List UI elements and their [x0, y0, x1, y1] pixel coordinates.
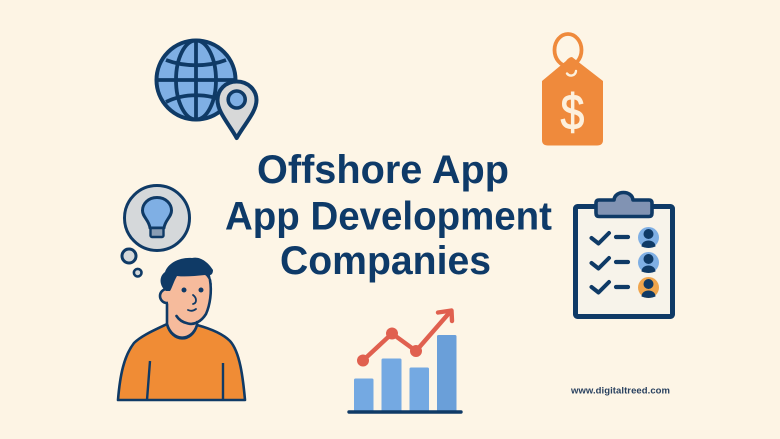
checklist row 3	[592, 277, 659, 298]
website url: www.digitaltreed.com	[570, 386, 670, 396]
chart baseline	[349, 410, 461, 414]
dollar sign: $	[561, 84, 584, 140]
orange sweater	[118, 324, 245, 400]
title: App Development	[225, 194, 552, 238]
ear	[160, 289, 174, 303]
clipboard clip	[596, 192, 652, 216]
eyes, nose and mouth	[182, 288, 186, 292]
hair	[161, 258, 213, 291]
checklist row 1	[592, 227, 659, 248]
trend line	[357, 310, 452, 366]
bars	[354, 335, 456, 412]
title	[225, 148, 552, 283]
icon: clipboard checklist	[576, 192, 672, 316]
thought bubble with bulb	[122, 186, 190, 277]
neck and jaw outlines	[167, 280, 211, 338]
icon: person thinking with light bulb	[118, 186, 245, 400]
checklist row 2	[592, 252, 659, 273]
title: Offshore App	[257, 148, 509, 192]
bar chart with rising arrow	[349, 310, 461, 412]
icon: orange price tag	[542, 34, 603, 146]
icon: globe with location pin	[156, 40, 256, 138]
title: Companies	[280, 239, 491, 283]
face and neck fill	[167, 270, 211, 337]
